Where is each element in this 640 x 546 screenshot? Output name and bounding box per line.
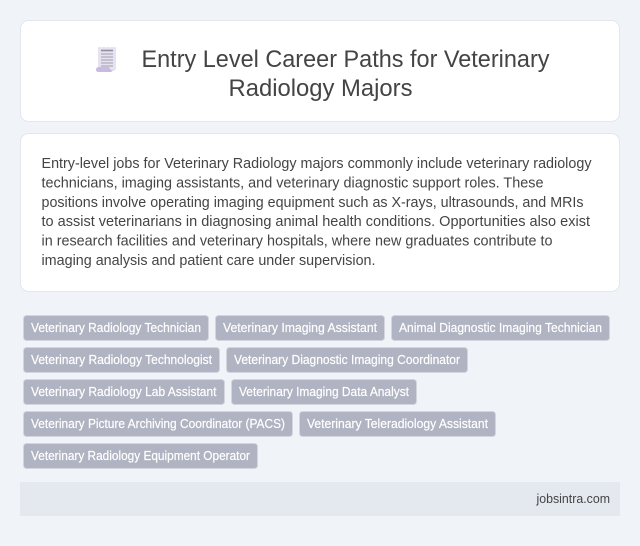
icon: document scroll: [96, 47, 116, 72]
tag: [24, 444, 258, 468]
tag: [300, 412, 496, 436]
tag: [24, 380, 224, 404]
title: Entry Level Career Paths for Veterinary: [142, 46, 550, 73]
tag: Veterinary Radiology Technician: [31, 321, 201, 335]
footer: [20, 482, 620, 516]
tag: [24, 348, 220, 372]
footer text: source: jobsintra.com: [536, 492, 610, 506]
tag: [392, 316, 610, 340]
text block: summary paragraph: imaging analysis and patient care under supervision.: [42, 252, 376, 269]
text block: summary paragraph: [42, 155, 592, 269]
tag: Veterinary Picture Archiving Coordinator (PACS): [31, 417, 285, 431]
text block: summary paragraph: technicians, imaging assistants, and veterinary diagnostic support roles. These: [42, 174, 544, 191]
tag: [24, 316, 208, 340]
tag: [216, 316, 384, 340]
tag: [232, 380, 416, 404]
tag list: [24, 316, 610, 468]
tag: Animal Diagnostic Imaging Technician: [399, 321, 602, 335]
tag: Veterinary Diagnostic Imaging Coordinator: [234, 353, 460, 367]
text block: summary paragraph: to assist veterinarians in diagnosing animal health conditions. Opportunities also exist: [42, 213, 591, 230]
panel: header: [20, 20, 620, 122]
tag: [24, 412, 292, 436]
panel: summary: [20, 134, 620, 292]
tag: Veterinary Radiology Lab Assistant: [31, 385, 217, 399]
text block: summary paragraph: in research facilities and veterinary hospitals, where new graduates contribute to: [42, 233, 552, 250]
title: [142, 46, 550, 102]
tag: Veterinary Imaging Data Analyst: [239, 385, 409, 399]
title: Radiology Majors: [228, 75, 412, 102]
tag: Veterinary Teleradiology Assistant: [307, 417, 488, 431]
text block: summary paragraph: positions involve operating imaging equipment such as X-rays, ultrasounds, and MRIs: [42, 194, 584, 211]
tag: [226, 348, 468, 372]
tag: Veterinary Imaging Assistant: [223, 321, 377, 335]
tag: Veterinary Radiology Technologist: [31, 353, 212, 367]
tag: Veterinary Radiology Equipment Operator: [31, 449, 250, 463]
text block: summary paragraph: Entry-level jobs for Veterinary Radiology majors commonly include veterinary radiology: [42, 155, 592, 172]
